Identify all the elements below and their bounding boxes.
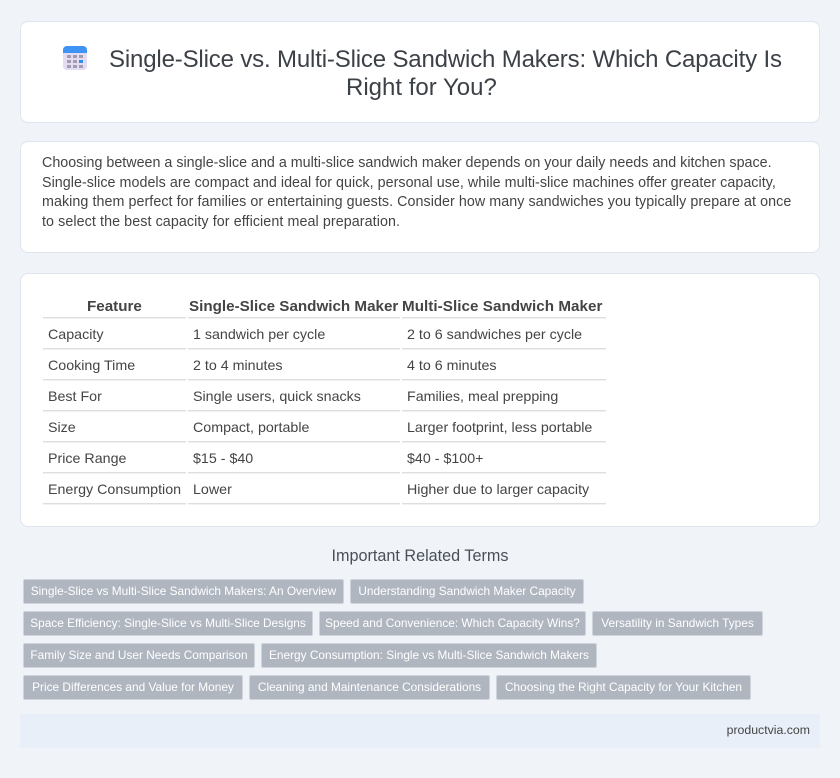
comparison table: Compact, portable	[193, 420, 309, 436]
comparison table: 2 to 4 minutes	[193, 358, 283, 374]
comparison table: 4 to 6 minutes	[407, 358, 497, 374]
related term tags: Versatility in Sandwich Types	[601, 616, 754, 630]
related term tags: Understanding Sandwich Maker Capacity	[358, 584, 576, 598]
related term tags	[23, 579, 763, 700]
related term tags: Family Size and User Needs Comparison	[30, 648, 248, 662]
table header: Single-Slice Sandwich Maker	[189, 298, 398, 315]
intro text	[42, 155, 791, 230]
related term tags: Single-Slice vs Multi-Slice Sandwich Makers: An Overview	[31, 584, 336, 598]
table header	[87, 298, 602, 315]
related term tags: Price Differences and Value for Money	[32, 680, 234, 694]
related term tags: Energy Consumption: Single vs Multi-Slice Sandwich Makers	[269, 648, 589, 662]
comparison table	[43, 298, 606, 505]
footer bar	[20, 714, 820, 748]
panel: introduction	[20, 141, 820, 253]
table header: Multi-Slice Sandwich Maker	[402, 298, 602, 315]
intro text: Single-slice models are compact and ideal for quick, personal use, while multi-slice machines offer greater capacity,	[42, 174, 776, 190]
panel: header card	[20, 21, 820, 123]
comparison table: Lower	[193, 482, 232, 498]
comparison table: Higher due to larger capacity	[407, 482, 589, 498]
comparison table: Capacity	[48, 327, 103, 343]
comparison table: 2 to 6 sandwiches per cycle	[407, 327, 582, 343]
comparison table: Size	[48, 420, 76, 436]
intro text: to select the best capacity for efficient meal preparation.	[42, 214, 400, 230]
related term tags: Space Efficiency: Single-Slice vs Multi-Slice Designs	[30, 616, 306, 630]
comparison table: Cooking Time	[48, 358, 135, 374]
icon: calendar	[63, 46, 87, 70]
related terms heading: Important Related Terms	[332, 547, 508, 565]
panel: comparison table	[20, 273, 820, 527]
comparison table: Single users, quick snacks	[193, 389, 361, 405]
related term tags: Choosing the Right Capacity for Your Kitchen	[505, 680, 742, 694]
comparison table: Larger footprint, less portable	[407, 420, 592, 436]
title	[109, 46, 782, 101]
comparison table: Best For	[48, 389, 102, 405]
footer source: productvia.com	[727, 723, 810, 737]
comparison table: 1 sandwich per cycle	[193, 327, 325, 343]
comparison table: $15 - $40	[193, 451, 253, 467]
related term tags: Speed and Convenience: Which Capacity Wins?	[325, 616, 580, 630]
comparison table: Energy Consumption	[48, 482, 181, 498]
intro text: Choosing between a single-slice and a multi-slice sandwich maker depends on your daily needs and kitchen space.	[42, 155, 772, 171]
intro text: making them perfect for families or entertaining guests. Consider how many sandwiches you typically prepare at once	[42, 194, 791, 210]
title: Single-Slice vs. Multi-Slice Sandwich Makers: Which Capacity Is	[109, 46, 782, 73]
comparison table: $40 - $100+	[407, 451, 483, 467]
table header: Feature	[87, 298, 142, 315]
comparison table: Families, meal prepping	[407, 389, 558, 405]
title: Right for You?	[346, 74, 497, 101]
comparison table: Price Range	[48, 451, 126, 467]
related term tags: Cleaning and Maintenance Considerations	[258, 680, 481, 694]
